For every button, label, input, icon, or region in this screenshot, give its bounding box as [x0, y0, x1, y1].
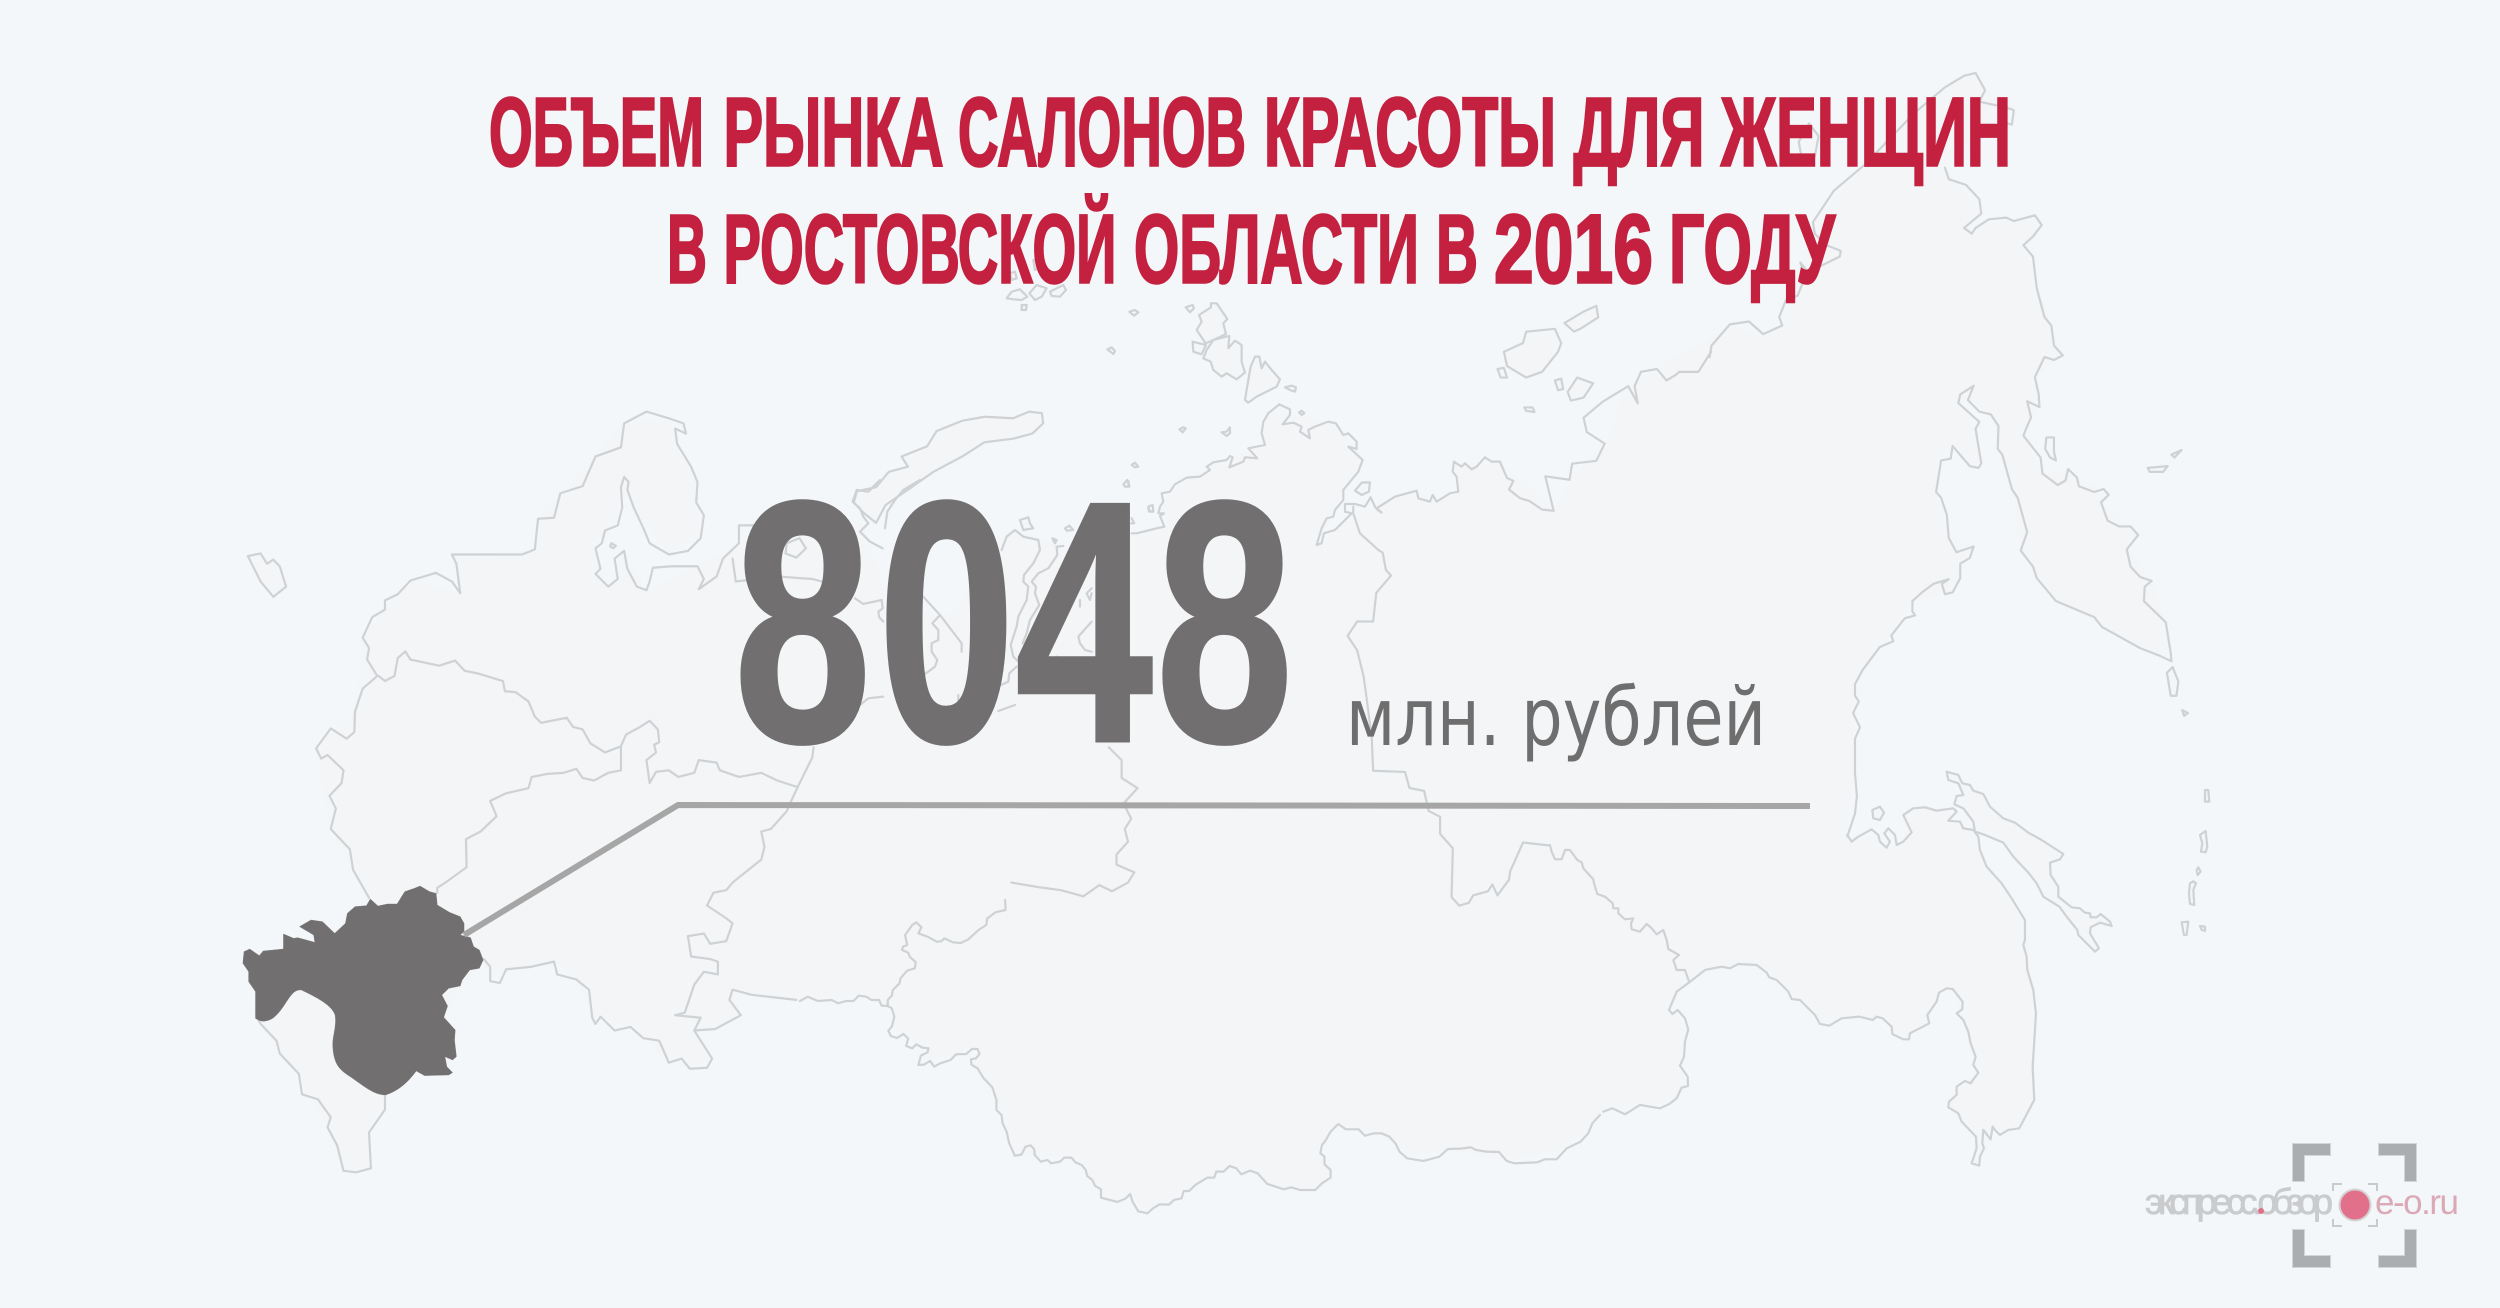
map of Russia [248, 73, 2209, 1213]
logo dot [2258, 1208, 2264, 1214]
logo camera frame corners [2292, 1144, 2416, 1268]
title: 2016 [1494, 194, 1653, 304]
connector line from region to value [464, 805, 1810, 935]
title: ОБЪЕМ [489, 78, 704, 186]
title [489, 78, 2011, 304]
title: РЫНКА [724, 78, 944, 186]
logo text right: e-o.ru [2375, 1183, 2459, 1222]
big number: 8048 [734, 430, 1293, 814]
logo pink circle [2340, 1190, 2370, 1220]
highlighted region: Rostov oblast [243, 886, 483, 1095]
title: РОСТОВСКОЙ [724, 194, 1116, 304]
logo: express review [2145, 1144, 2459, 1268]
logo small brackets [2333, 1184, 2377, 1226]
title: В [1436, 194, 1478, 304]
title: ЖЕНЩИН [1720, 78, 2011, 186]
title: КРАСОТЫ [1264, 78, 1556, 186]
unit label: млн. рублей [1346, 671, 1766, 764]
title: ГОДУ [1669, 194, 1836, 304]
title: В [667, 194, 707, 304]
title: ОБЛАСТИ [1134, 194, 1419, 304]
title: САЛОНОВ [958, 78, 1246, 186]
logo text left: экспресс.обзор [2145, 1181, 2333, 1222]
title: ДЛЯ [1574, 78, 1704, 186]
